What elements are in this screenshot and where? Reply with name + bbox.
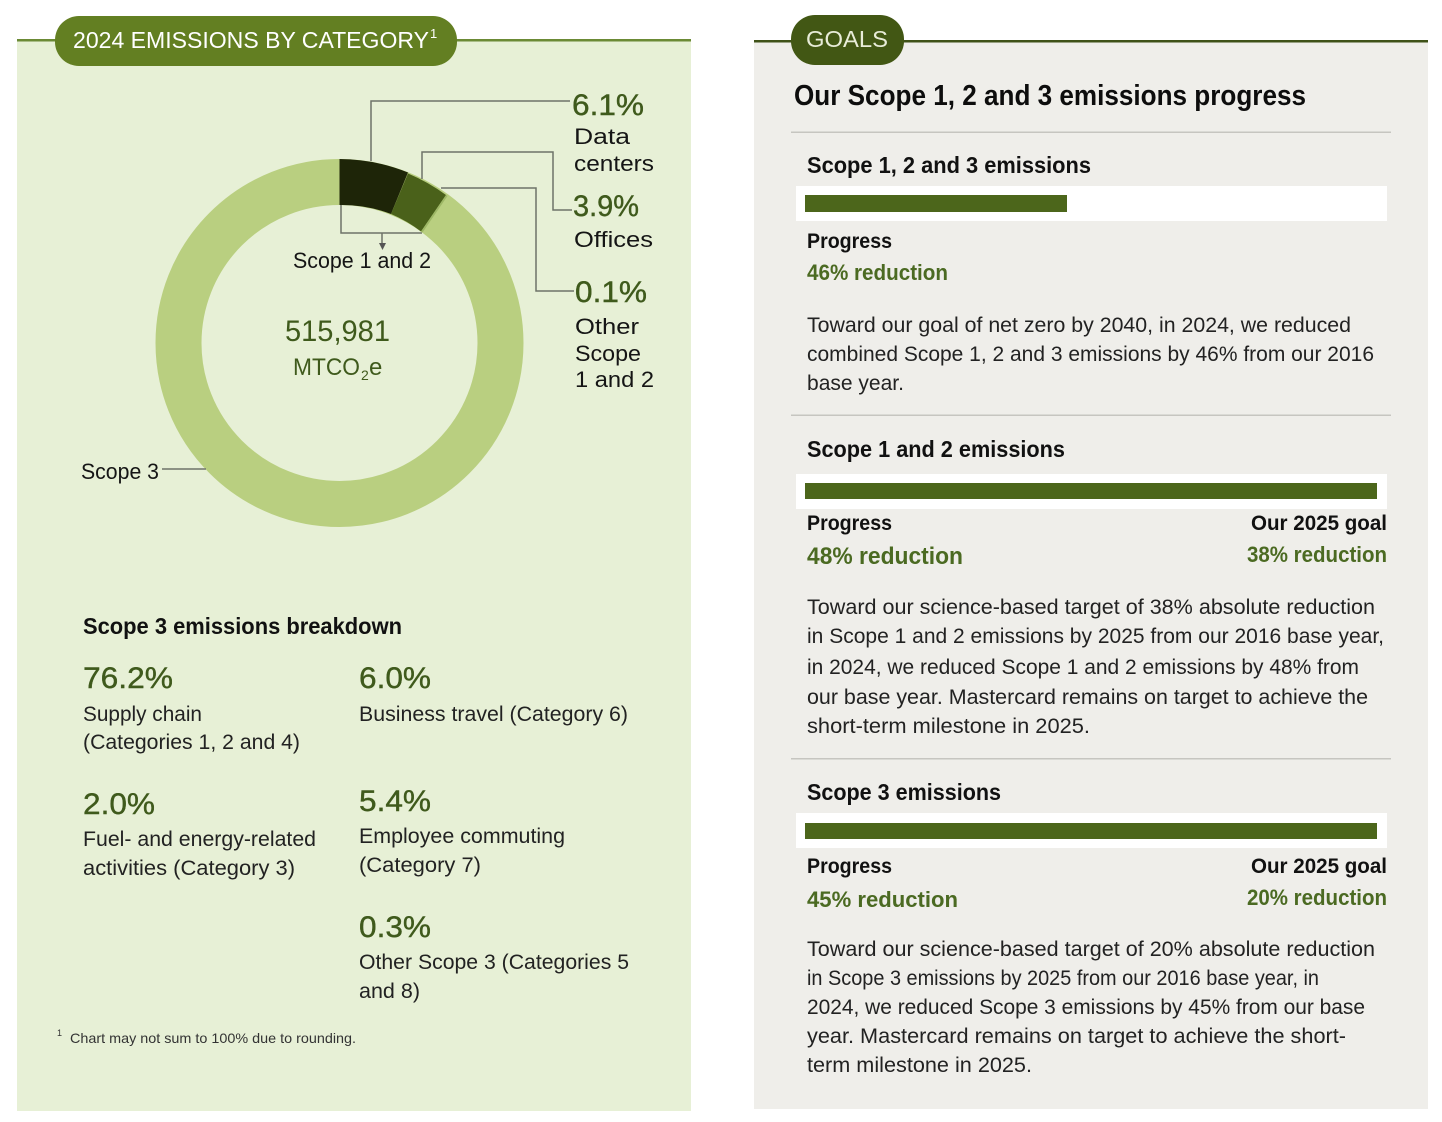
progress bar: 46% <box>796 186 1387 221</box>
stat: fuel and energy <box>83 788 316 880</box>
heading pill: 2024 emissions by category <box>55 16 457 66</box>
section: scope 3 emissions: Our 2025 goal <box>1251 854 1387 878</box>
progress bar: 48% <box>796 474 1387 509</box>
stat: employee commuting: Employee commuting <box>359 824 565 848</box>
stat: employee commuting: 5.4% <box>359 785 431 818</box>
section: scope 1 and 2 emissions: Progress <box>807 511 892 535</box>
center total: e <box>369 354 382 381</box>
section: scope 1, 2 and 3 emissions: Toward our goal of net zero by 2040, in 2024, we reduced <box>807 313 1351 337</box>
callout: other scope 1 and 2: 1 and 2 <box>575 367 654 392</box>
arrow: scope 1 and 2 <box>379 243 386 250</box>
section: scope 1 and 2 emissions: 48% reduction <box>807 543 963 570</box>
heading pill: 2024 emissions by category: 2024 EMISSIONS BY CATEGORY <box>73 27 429 53</box>
stat: employee commuting <box>359 785 565 877</box>
section: scope 1, 2 and 3 emissions: Progress <box>807 229 892 253</box>
section: scope 1, 2 and 3 emissions: base year. <box>807 371 904 395</box>
stat: fuel and energy: Fuel- and energy-related <box>83 827 316 851</box>
footnote: 1 <box>57 1028 62 1038</box>
section: scope 3 emissions: Scope 3 emissions <box>807 779 1001 805</box>
callout: other scope 1 and 2: 0.1% <box>575 276 647 309</box>
section: scope 3 emissions: Progress <box>807 854 892 878</box>
heading pill: 2024 emissions by category: 1 <box>430 26 437 41</box>
callout: other scope 1 and 2 <box>575 276 654 392</box>
section: scope 3 emissions: term milestone in 2025. <box>807 1053 1032 1077</box>
section: scope 1 and 2 emissions: Our 2025 goal <box>1251 511 1387 535</box>
section: scope 1 and 2 emissions: Scope 1 and 2 emissions <box>807 436 1065 462</box>
section: scope 3 emissions <box>796 779 1387 1077</box>
section: scope 3 emissions: Toward our science-based target of 20% absolute reduction <box>807 937 1375 961</box>
stat: supply chain: 76.2% <box>83 662 173 695</box>
stat: other scope 3: and 8) <box>359 979 420 1003</box>
center total: 2 <box>361 367 369 383</box>
section: scope 1 and 2 emissions: in Scope 1 and 2 emissions by 2025 from our 2016 base year, <box>807 624 1384 648</box>
label: scope 3: Scope 3 <box>81 459 159 484</box>
stat: business travel: Business travel (Category 6) <box>359 702 628 726</box>
title: emissions progress: Our Scope 1, 2 and 3 emissions progress <box>794 80 1306 112</box>
center total <box>285 315 390 383</box>
section: scope 3 emissions: 20% reduction <box>1247 885 1387 910</box>
stat: other scope 3: 0.3% <box>359 911 431 944</box>
callout: data centers: Data <box>574 124 631 149</box>
stat: fuel and energy: activities (Category 3) <box>83 856 295 880</box>
callout: other scope 1 and 2: Other <box>575 314 639 339</box>
section: scope 1 and 2 emissions: in 2024, we reduced Scope 1 and 2 emissions by 48% from <box>807 655 1359 679</box>
section: scope 1, 2 and 3 emissions: 46% reduction <box>807 260 948 285</box>
section: scope 1 and 2 emissions: short-term milestone in 2025. <box>807 714 1090 738</box>
heading pill: goals: GOALS <box>806 26 888 52</box>
heading pill: goals <box>791 15 904 65</box>
stat: supply chain: Supply chain <box>83 702 202 726</box>
callout: other scope 1 and 2: Scope <box>575 341 641 366</box>
section: scope 1 and 2 emissions <box>796 436 1387 738</box>
callout: offices <box>573 190 653 252</box>
callout: data centers: 6.1% <box>572 89 644 122</box>
stat: business travel <box>359 662 628 726</box>
stat: other scope 3 <box>359 911 629 1003</box>
section: scope 3 emissions: 45% reduction <box>807 887 958 912</box>
stat: business travel: 6.0% <box>359 662 431 695</box>
heading: scope 3 breakdown: Scope 3 emissions breakdown <box>83 613 402 639</box>
footnote: Chart may not sum to 100% due to rounding. <box>70 1030 356 1046</box>
leader lines <box>162 101 574 469</box>
callout: data centers <box>572 89 654 176</box>
donut chart <box>178 159 500 504</box>
label: scope 1 and 2: Scope 1 and 2 <box>293 248 431 273</box>
section: scope 1 and 2 emissions: our base year. Mastercard remains on target to achieve the <box>807 685 1368 709</box>
panel: goals <box>754 15 1428 1109</box>
stat: other scope 3: Other Scope 3 (Categories 5 <box>359 950 629 974</box>
callout: data centers: centers <box>574 151 654 176</box>
callout: offices: 3.9% <box>573 190 639 223</box>
stat: fuel and energy: 2.0% <box>83 788 155 821</box>
section: scope 1, 2 and 3 emissions: combined Scope 1, 2 and 3 emissions by 46% from our 2016 <box>807 342 1374 366</box>
stat: supply chain <box>83 662 300 754</box>
panel: 2024 emissions by category <box>17 16 691 1111</box>
callout: offices: Offices <box>574 227 653 252</box>
section: scope 1 and 2 emissions: Toward our science-based target of 38% absolute reduction <box>807 595 1375 619</box>
section: scope 1 and 2 emissions: 38% reduction <box>1247 542 1387 567</box>
section: scope 3 emissions: in Scope 3 emissions by 2025 from our 2016 base year, in <box>807 966 1319 990</box>
section: scope 1, 2 and 3 emissions <box>796 152 1387 395</box>
stat: supply chain: (Categories 1, 2 and 4) <box>83 730 300 754</box>
stat: employee commuting: (Category 7) <box>359 853 481 877</box>
section: scope 1, 2 and 3 emissions: Scope 1, 2 and 3 emissions <box>807 152 1091 178</box>
section: scope 3 emissions: 2024, we reduced Scope 3 emissions by 45% from our base <box>807 995 1365 1019</box>
center total: MTCO <box>293 354 360 381</box>
center total: 515,981 <box>285 315 390 348</box>
section: scope 3 emissions: year. Mastercard remains on target to achieve the short- <box>807 1024 1346 1048</box>
progress bar: 45% <box>796 813 1387 848</box>
